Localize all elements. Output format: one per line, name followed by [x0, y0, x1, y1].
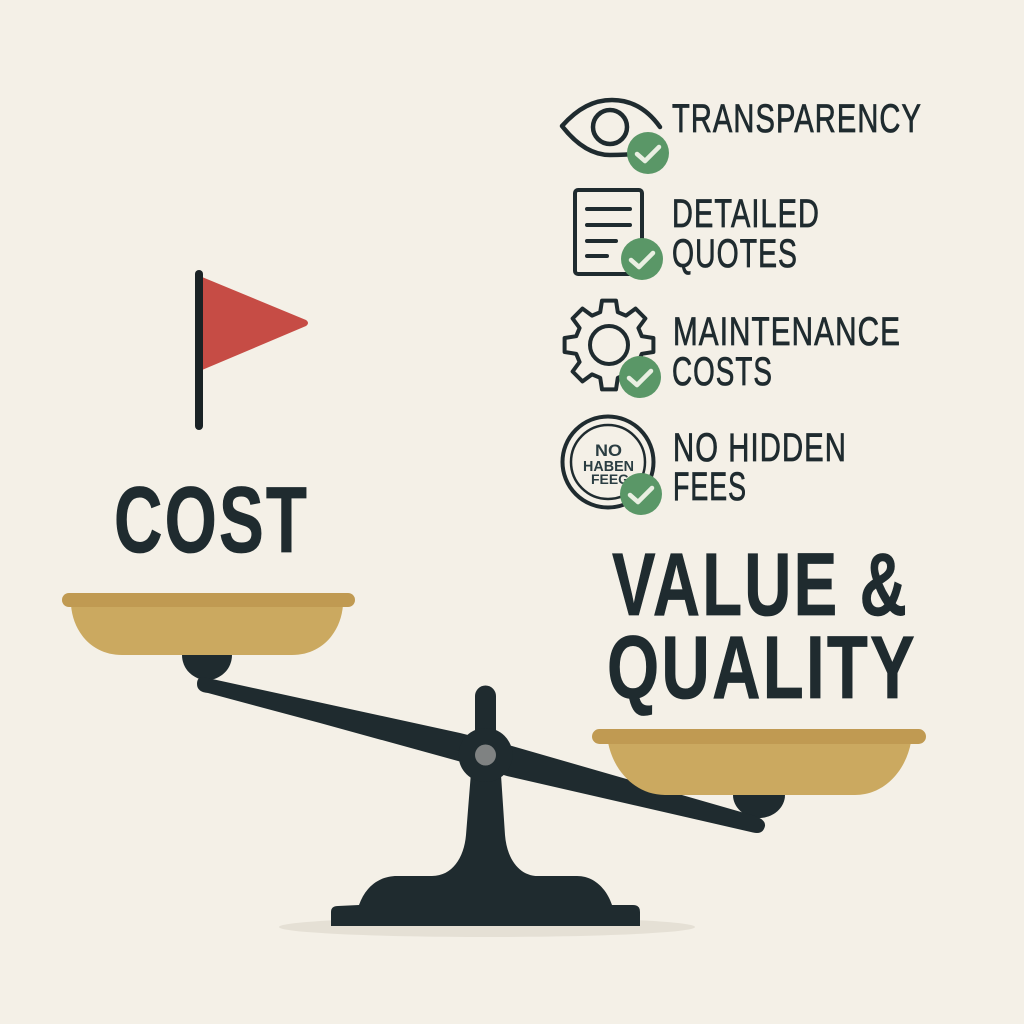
- balance scale: [62, 593, 926, 937]
- label: maintenance costs: COSTS: [672, 350, 773, 394]
- item: maintenance costs: [565, 301, 901, 398]
- heading: value and quality: QUALITY: [607, 617, 917, 717]
- left pan: [62, 593, 355, 655]
- icon: green check badge: [627, 132, 669, 174]
- pivot pin: [475, 744, 496, 766]
- icon: no hidden fees stamp: FEEG: [591, 471, 629, 487]
- icon: green check badge: [621, 238, 663, 280]
- base shadow: [279, 917, 695, 937]
- icon: document: [575, 190, 642, 274]
- item: no hidden fees: [562, 416, 847, 515]
- right pan: [592, 729, 926, 795]
- heading: cost: COST: [114, 467, 309, 572]
- label: detailed quotes: QUOTES: [672, 232, 798, 276]
- scale beam: [197, 677, 765, 833]
- icon: no hidden fees stamp: [562, 416, 654, 508]
- left pan knob: [182, 655, 232, 680]
- icon: eye: [562, 100, 660, 155]
- label: transparency: TRANSPARENCY: [672, 97, 922, 141]
- heading: value and quality: VALUE &: [612, 534, 909, 634]
- icon: gear: [565, 301, 653, 389]
- icon: no hidden fees stamp: NO: [595, 441, 622, 460]
- label: maintenance costs: MAINTENANCE: [673, 310, 901, 354]
- item: detailed quotes: [575, 190, 820, 280]
- pivot hub: [458, 728, 512, 782]
- item: transparency: [562, 97, 922, 174]
- label: no hidden fees: FEES: [673, 465, 747, 509]
- icon: green check badge: [620, 473, 662, 515]
- label: no hidden fees: NO HIDDEN: [673, 426, 847, 470]
- label: detailed quotes: DETAILED: [672, 192, 820, 236]
- icon: green check badge: [619, 356, 661, 398]
- icon: red flag: [195, 270, 308, 430]
- right pan knob: [733, 795, 785, 818]
- icon: no hidden fees stamp: HABEN: [583, 458, 634, 475]
- scale stand: [331, 686, 640, 926]
